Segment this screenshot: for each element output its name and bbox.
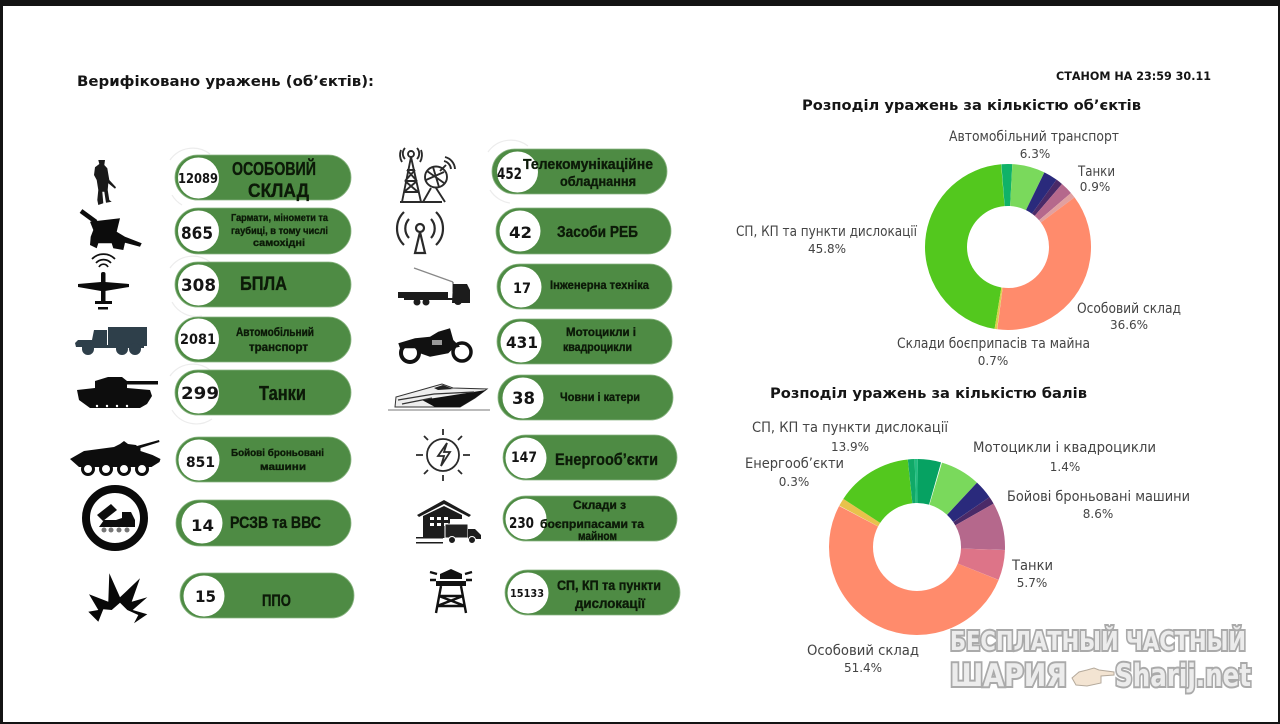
row: command posts: СП, КП та пункти	[557, 578, 661, 593]
row: artillery: 865	[181, 224, 213, 243]
icon: tank	[77, 377, 158, 408]
chart 1 labels: 45.8%	[808, 242, 846, 256]
date stamp: СТАНОМ НА 23:59 30.11	[1056, 69, 1211, 83]
watermark	[950, 625, 1251, 694]
chart 1 labels: 36.6%	[1110, 318, 1148, 332]
row: command posts: дислокації	[575, 596, 646, 611]
row: boats: Човни і катери	[560, 392, 640, 404]
row: air defence	[180, 573, 354, 618]
heading: chart 2: Розподіл уражень за кількістю балів	[770, 386, 1087, 402]
chart 2 labels: 8.6%	[1083, 507, 1113, 521]
icon: artillery	[81, 211, 142, 250]
icon: energy sun	[416, 429, 470, 481]
row: engineering vehicles: 17	[513, 281, 531, 297]
row: armoured vehicles: машини	[260, 461, 306, 473]
row: vehicles: Автомобільний	[236, 327, 314, 339]
row: EW: Засоби РЕБ	[557, 224, 638, 241]
donut chart: hits by points	[824, 454, 1010, 640]
row: armoured vehicles: 851	[186, 455, 215, 471]
row: warehouses: майном	[578, 531, 617, 543]
icon: rocket launcher in circle	[86, 489, 144, 547]
row: tanks	[170, 364, 351, 424]
chart 1 labels: СП, КП та пункти дислокації	[736, 224, 917, 240]
row: warehouses: Склади з	[573, 500, 626, 512]
icon: explosion	[88, 573, 147, 623]
row: EW	[496, 208, 671, 254]
chart 2 labels: 13.9%	[831, 440, 869, 454]
row: tanks: 299	[181, 384, 219, 404]
row: UAV: БПЛА	[240, 274, 287, 295]
row: energy	[503, 435, 677, 480]
chart 1 labels	[736, 129, 1181, 368]
row: warehouses: 230	[509, 514, 534, 532]
icon: watchtower	[430, 569, 472, 613]
icon: truck	[75, 327, 147, 355]
row: personnel: СКЛАД	[248, 181, 309, 202]
row: UAV	[170, 256, 351, 317]
chart 1 labels: Особовий склад	[1077, 301, 1181, 317]
heading: chart 1: Розподіл уражень за кількістю об’єктів	[802, 98, 1141, 114]
row: EW: 42	[509, 223, 532, 242]
row: warehouses	[503, 496, 677, 543]
row: MLRS	[176, 500, 351, 546]
row: boats	[498, 375, 673, 420]
row: telecom equipment	[488, 140, 667, 203]
chart 1 labels: Танки	[1077, 164, 1115, 180]
row: motorcycles: квадроцикли	[563, 340, 632, 354]
row: MLRS: РСЗВ та ВВС	[230, 513, 321, 532]
chart 2 labels: Особовий склад	[807, 643, 919, 659]
donut chart: hits by objects	[921, 160, 1095, 334]
row: vehicles: 2081	[180, 332, 216, 348]
chart 1 labels: Склади боєприпасів та майна	[897, 336, 1090, 352]
row: air defence: 15	[195, 587, 216, 606]
row: motorcycles: 431	[506, 333, 538, 352]
icon: EW antenna	[397, 212, 443, 253]
chart 2 labels: Танки	[1011, 558, 1053, 574]
row: telecom equipment: обладнання	[560, 174, 636, 189]
chart 2 labels: Енергооб’єкти	[745, 456, 844, 472]
icon: armoured vehicle	[70, 440, 160, 474]
icon: telecom tower	[400, 148, 455, 202]
row: MLRS: 14	[191, 516, 214, 535]
row: telecom equipment: Телекомунікаційне	[523, 156, 653, 173]
row: warehouses: боєприпасами та	[540, 517, 644, 531]
chart 2 labels: СП, КП та пункти дислокації	[752, 420, 948, 436]
row: personnel: 12089	[178, 172, 218, 187]
watermark: ШАРИЯ	[950, 658, 1067, 694]
row: artillery: самохідні	[253, 237, 305, 249]
row: engineering vehicles: Інженерна техніка	[550, 280, 650, 292]
row: personnel: ОСОБОВИЙ	[232, 158, 316, 179]
icon: drone	[78, 254, 129, 310]
icon: warehouse	[416, 500, 481, 544]
row: boats: 38	[512, 389, 535, 409]
chart 2 labels: 1.4%	[1050, 460, 1080, 474]
row: telecom equipment: 452	[497, 164, 522, 183]
row: artillery	[175, 208, 351, 254]
row: vehicles: транспорт	[249, 342, 308, 354]
row: energy: 147	[511, 450, 537, 466]
row: armoured vehicles: Бойові броньовані	[231, 447, 324, 459]
row: armoured vehicles	[176, 437, 351, 482]
chart 1 labels: 6.3%	[1020, 147, 1050, 161]
row: energy: Енергооб’єкти	[555, 450, 658, 469]
row: artillery: Гармати, міномети та	[231, 212, 328, 224]
row: motorcycles: Мотоцикли і	[566, 325, 636, 339]
row: command posts: 15133	[510, 587, 544, 600]
icon: boat	[388, 384, 490, 410]
chart 2 labels: Бойові броньовані машини	[1007, 489, 1190, 505]
icon: engineering truck	[398, 268, 470, 306]
chart 2 labels: 5.7%	[1017, 576, 1047, 590]
icon: soldier	[94, 160, 116, 205]
chart 1 labels: 0.9%	[1080, 180, 1110, 194]
row: motorcycles	[497, 319, 672, 364]
chart 2 labels: 51.4%	[844, 661, 882, 675]
chart 1 labels: Автомобільний транспорт	[949, 129, 1119, 145]
icon: motorcycle	[398, 328, 471, 362]
chart 2 labels: 0.3%	[779, 475, 809, 489]
row: vehicles	[175, 317, 351, 362]
chart 2 labels	[745, 420, 1190, 675]
row: artillery: гаубиці, в тому числі	[231, 225, 328, 237]
row: UAV: 308	[181, 276, 216, 296]
heading: verified hits: Верифіковано уражень (об’єктів):	[77, 74, 374, 90]
chart 2 labels: Мотоцикли і квадроцикли	[973, 440, 1156, 456]
row: engineering vehicles	[497, 264, 672, 309]
row: air defence: ППО	[262, 591, 291, 610]
row: command posts	[505, 570, 680, 615]
row: personnel	[170, 148, 351, 205]
row: tanks: Танки	[259, 383, 306, 405]
chart 1 labels: 0.7%	[978, 354, 1008, 368]
